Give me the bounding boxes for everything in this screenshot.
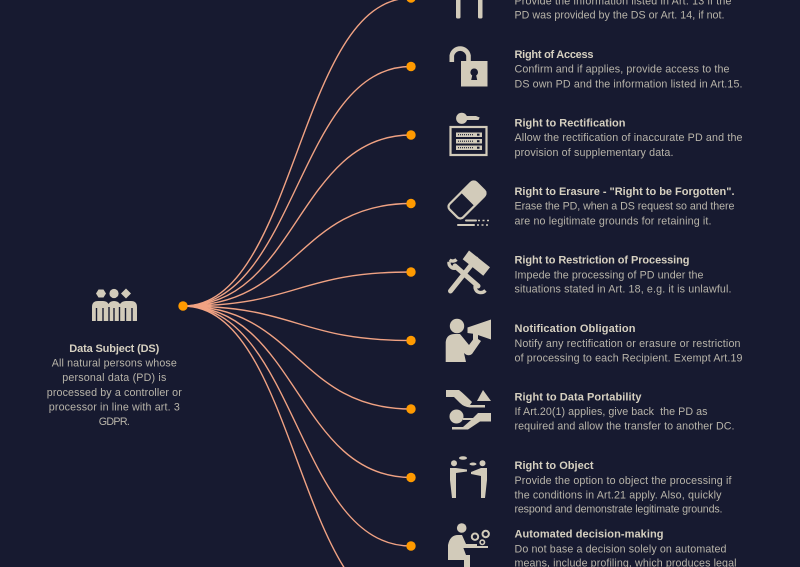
description: data subject: processor in line with art. 3	[49, 402, 180, 414]
description: data subject: All natural persons whose	[52, 358, 177, 370]
row: right to restriction of processing	[406, 250, 732, 296]
heading: Right to Rectification	[514, 118, 626, 130]
icon: group of people	[92, 288, 137, 321]
description: data subject	[47, 358, 182, 428]
description: DS own PD and the information listed in Art.15.	[514, 78, 742, 90]
node	[406, 199, 416, 208]
description: situations stated in Art. 18, e.g. it is unlawful.	[514, 284, 732, 296]
panel: data subject	[47, 288, 188, 428]
description: are no legitimate grounds for retaining it.	[514, 215, 712, 227]
heading: Right to Object	[514, 460, 594, 472]
row: right to information	[406, 0, 732, 22]
row: right to data portability	[406, 390, 734, 433]
heading: Right to Erasure - "Right to be Forgotten".	[514, 186, 734, 198]
description: If Art.20(1) applies, give back the PD as	[514, 406, 708, 418]
icon: people legs	[456, 0, 482, 18]
icon: person at desk with gears	[448, 523, 489, 567]
description: data subject: personal data (PD) is	[62, 372, 166, 384]
description: respond and demonstrate legitimate grounds.	[514, 504, 722, 516]
heading: Right to Restriction of Processing	[514, 254, 690, 266]
description	[514, 0, 732, 22]
description: Notify any rectification or erasure or restriction	[514, 338, 741, 350]
icon: eraser	[446, 178, 490, 226]
description	[514, 338, 743, 364]
row: right to rectification	[406, 113, 743, 159]
heading: Notification Obligation	[514, 323, 636, 335]
row: automated decision-making	[406, 523, 736, 567]
description: Confirm and if applies, provide access to the	[514, 64, 730, 76]
description	[514, 132, 743, 159]
node	[406, 541, 416, 551]
heading: Right to Data Portability	[514, 391, 642, 403]
icon: person with megaphone	[446, 319, 491, 362]
heading: Automated decision-making	[514, 529, 664, 541]
icon: open padlock	[452, 49, 488, 86]
connector curves	[183, 0, 411, 567]
description: data subject: GDPR.	[99, 416, 130, 428]
icon: hammer and wrench	[449, 250, 490, 293]
row: notification obligation	[406, 319, 743, 364]
node	[406, 130, 416, 140]
description	[514, 475, 732, 516]
description: provision of supplementary data.	[514, 147, 674, 159]
node	[406, 473, 416, 482]
node	[406, 0, 416, 3]
node	[406, 62, 416, 71]
node	[406, 267, 416, 277]
description: required and allow the transfer to another DC.	[514, 421, 734, 433]
description: Erase the PD, when a DS request so and there	[514, 201, 735, 213]
description: Impede the processing of PD under the	[514, 269, 704, 281]
source node	[178, 301, 188, 311]
description: data subject: processed by a controller or	[47, 387, 182, 399]
heading: data subject: Data Subject (DS)	[69, 343, 160, 355]
row: right of access	[406, 49, 742, 90]
description: the conditions in Art.21 apply. Also, quickly	[514, 489, 722, 501]
description	[514, 406, 734, 433]
description: PD was provided by the DS or Art. 14, if not.	[514, 10, 724, 22]
row: right to object	[406, 456, 732, 516]
row: right to erasure	[406, 178, 735, 227]
description	[514, 543, 736, 567]
icon: hands exchanging shapes	[446, 390, 491, 430]
icon: two people talking	[450, 456, 487, 498]
description	[514, 269, 732, 296]
description	[514, 64, 742, 90]
description: Provide the option to object the processing if	[514, 475, 732, 487]
node	[406, 336, 416, 345]
node	[406, 404, 416, 414]
heading: Right of Access	[514, 49, 594, 61]
description: Allow the rectification of inaccurate PD and the	[514, 132, 743, 144]
description: Do not base a decision solely on automated	[514, 543, 727, 555]
description: of processing to each Recipient. Exempt Art.19	[514, 352, 743, 364]
icon: key and filing cabinet	[450, 113, 486, 155]
description	[514, 201, 735, 227]
